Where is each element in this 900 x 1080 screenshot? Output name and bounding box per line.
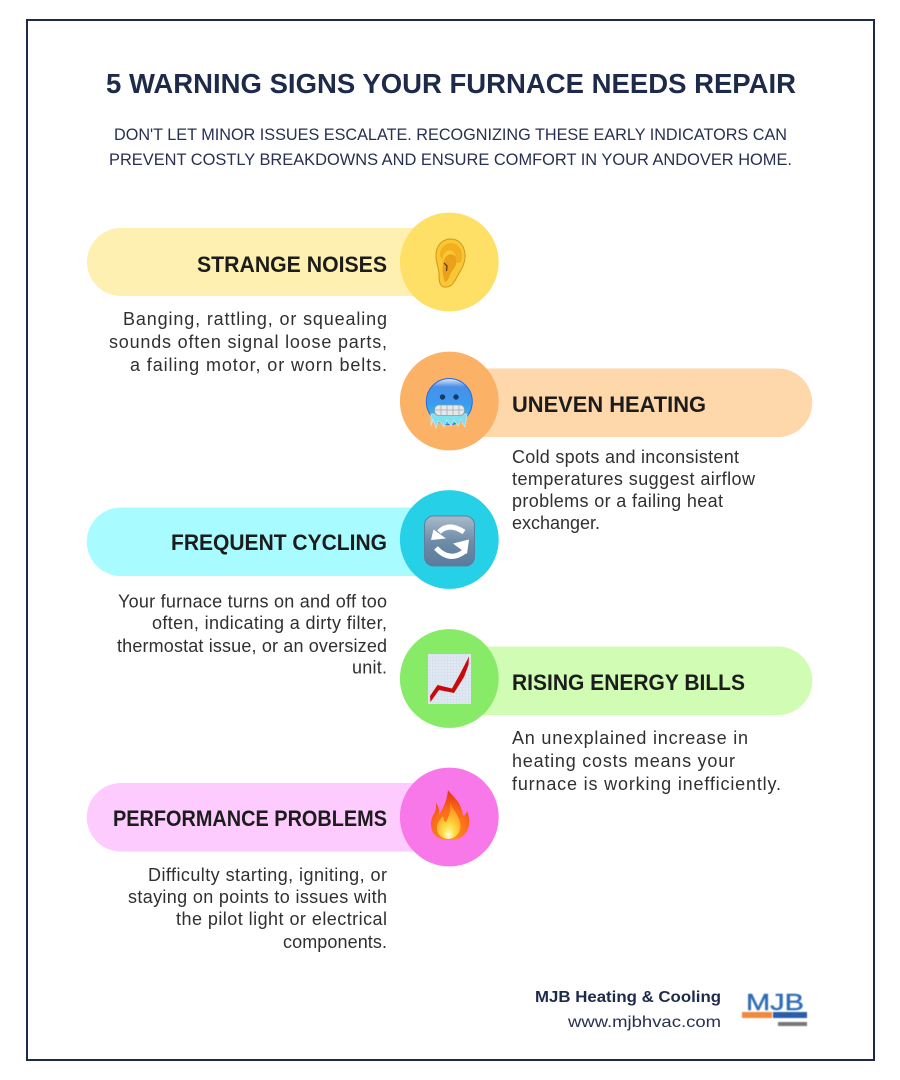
description: strange noises: [109, 309, 387, 375]
icon circle and ear: [400, 213, 499, 311]
panel: uneven heating: [400, 352, 812, 533]
heading: rising energy bills: RISING ENERGY BILLS: [512, 670, 745, 695]
footer website: www.mjbhvac.com: [567, 1014, 721, 1031]
subtitle: [109, 125, 792, 169]
description: uneven heating: Cold spots and inconsistent: [512, 447, 739, 467]
description: strange noises: sounds often signal loose parts,: [109, 332, 387, 352]
description: performance problems: [128, 865, 387, 952]
logo: [742, 989, 807, 1026]
pill: strange noises: [87, 228, 449, 296]
description: uneven heating: [512, 447, 756, 533]
description: performance problems: Difficulty starting, igniting, or: [148, 865, 387, 885]
panel: performance problems: [87, 768, 499, 952]
logo: MJB: [746, 989, 804, 1015]
subtitle: PREVENT COSTLY BREAKDOWNS AND ENSURE COMFORT IN YOUR ANDOVER HOME.: [109, 150, 792, 169]
description: rising energy bills: heating costs means your: [512, 751, 735, 771]
panel: strange noises: [87, 213, 499, 375]
description: performance problems: components.: [283, 932, 387, 952]
description: uneven heating: temperatures suggest airflow: [512, 469, 756, 489]
heading: strange noises: STRANGE NOISES: [197, 252, 387, 277]
description: uneven heating: problems or a failing heat: [512, 491, 723, 511]
footer company name: MJB Heating & Cooling: [535, 989, 721, 1006]
icon circle and cycle arrows: [400, 490, 499, 589]
description: frequent cycling: thermostat issue, or an oversized: [117, 636, 387, 656]
description: performance problems: staying on points to issues with: [128, 887, 387, 907]
subtitle: DON'T LET MINOR ISSUES ESCALATE. RECOGNIZING THESE EARLY INDICATORS CAN: [114, 125, 787, 144]
description: strange noises: a failing motor, or worn belts.: [130, 355, 387, 375]
description: frequent cycling: [117, 592, 387, 678]
icon circle and cold face: [400, 352, 499, 450]
pill: performance problems: [87, 783, 449, 852]
heading: frequent cycling: FREQUENT CYCLING: [171, 530, 387, 555]
pill: frequent cycling: [87, 508, 449, 576]
icon circle and flame: [400, 768, 499, 866]
description: uneven heating: exchanger.: [512, 513, 600, 533]
description: rising energy bills: An unexplained increase in: [512, 728, 748, 748]
description: frequent cycling: unit.: [352, 658, 387, 678]
description: strange noises: Banging, rattling, or squealing: [123, 309, 387, 329]
panel: rising energy bills: [400, 629, 812, 794]
pill: uneven heating: [449, 368, 812, 437]
description: frequent cycling: often, indicating a dirty filter,: [152, 613, 387, 633]
pill: rising energy bills: [449, 646, 812, 715]
panel: frequent cycling: [87, 490, 499, 678]
heading: uneven heating: UNEVEN HEATING: [512, 392, 706, 417]
icon circle and rising chart: [400, 629, 499, 728]
description: frequent cycling: Your furnace turns on and off too: [118, 592, 387, 612]
description: rising energy bills: furnace is working inefficiently.: [512, 774, 781, 794]
title: 5 WARNING SIGNS YOUR FURNACE NEEDS REPAIR: [106, 68, 796, 99]
description: performance problems: the pilot light or electrical: [176, 909, 387, 929]
description: rising energy bills: [512, 728, 781, 794]
heading: performance problems: PERFORMANCE PROBLEMS: [113, 806, 387, 831]
